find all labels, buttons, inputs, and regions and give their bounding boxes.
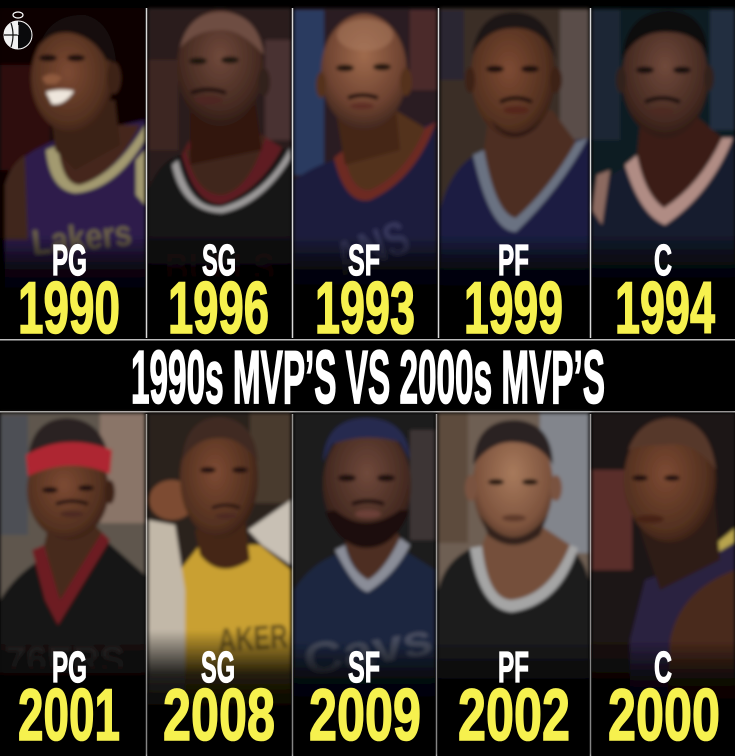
label: PG 2001: PG [52, 643, 87, 692]
jersey [592, 135, 735, 338]
panel: SG 1996: BULLS [165, 247, 275, 289]
panel: C 2000 [592, 413, 735, 756]
label: C 1994: C [654, 236, 672, 285]
label: PF 1999: PF [498, 236, 529, 285]
jersey [294, 545, 435, 756]
panel: SF 1993 [294, 8, 437, 338]
panel: SF 2009: Cavs [300, 615, 436, 685]
jersey [440, 138, 589, 338]
label: SG 1996 [168, 236, 269, 349]
jersey [630, 530, 735, 756]
label: PF 2002 [458, 643, 570, 756]
label: PG 2001: 2001 [18, 675, 120, 756]
label: SF 1993: SF [348, 236, 380, 285]
label: SF 2009 [309, 643, 421, 756]
panel: SG 1996 [148, 8, 291, 338]
label: SG 1996: 1996 [168, 268, 269, 349]
panel: C 1994 [592, 8, 735, 338]
label: PG 2001 [18, 643, 120, 756]
label: PG 1990: PG [52, 236, 87, 285]
label: PG 1990: 1990 [18, 268, 120, 349]
neck and head [50, 100, 120, 170]
panel: PG 1990 [0, 8, 145, 338]
neck and head [335, 100, 400, 165]
label: C 2000 [608, 643, 720, 756]
neck and head [640, 500, 720, 590]
label: PF 2002: PF [498, 643, 529, 692]
label: SF 2009: SF [348, 643, 380, 692]
panel: SF 2009 [294, 413, 436, 756]
panel: PG 1990: Lakers [30, 212, 134, 263]
label: SG 2008: SG [201, 643, 235, 692]
panel: PG 2001 [0, 413, 145, 756]
jersey [294, 122, 437, 338]
neck and head [27, 440, 109, 540]
jersey [180, 545, 291, 756]
panel: PF 2002 [438, 413, 589, 756]
label: PF 1999: 1999 [464, 268, 563, 349]
icon: stopwatch basketball logo [4, 12, 32, 49]
jersey [438, 548, 589, 756]
label: SF 1993: 1993 [315, 268, 415, 349]
neck and head [323, 425, 411, 545]
label: C 2000: C [654, 643, 672, 692]
jersey [0, 535, 145, 756]
neck and head [471, 14, 555, 138]
panel: SG 2008: AKER [217, 617, 289, 660]
label: SF 2009: 2009 [309, 675, 421, 756]
label: SF 1993 [315, 236, 415, 349]
neck and head [195, 520, 250, 569]
panel: SG 2008 [148, 413, 291, 756]
label: SG 1996: SG [202, 236, 236, 285]
neck and head [473, 425, 553, 545]
label: PG 1990 [18, 236, 120, 349]
jersey [5, 120, 145, 338]
panel: PF 1999 [440, 8, 589, 338]
panel: SF 1993: ANS [328, 211, 416, 286]
neck and head [622, 18, 708, 138]
neck and head [190, 100, 262, 165]
jersey [148, 148, 291, 338]
raised fist [149, 480, 195, 520]
panel: PG 2001: 76ERS [5, 639, 125, 680]
label: SG 2008: 2008 [163, 675, 275, 756]
label: PF 1999 [464, 236, 563, 349]
label: PF 2002: 2002 [458, 675, 570, 756]
label: C 1994 [615, 236, 715, 349]
label: SG 2008 [163, 643, 275, 756]
